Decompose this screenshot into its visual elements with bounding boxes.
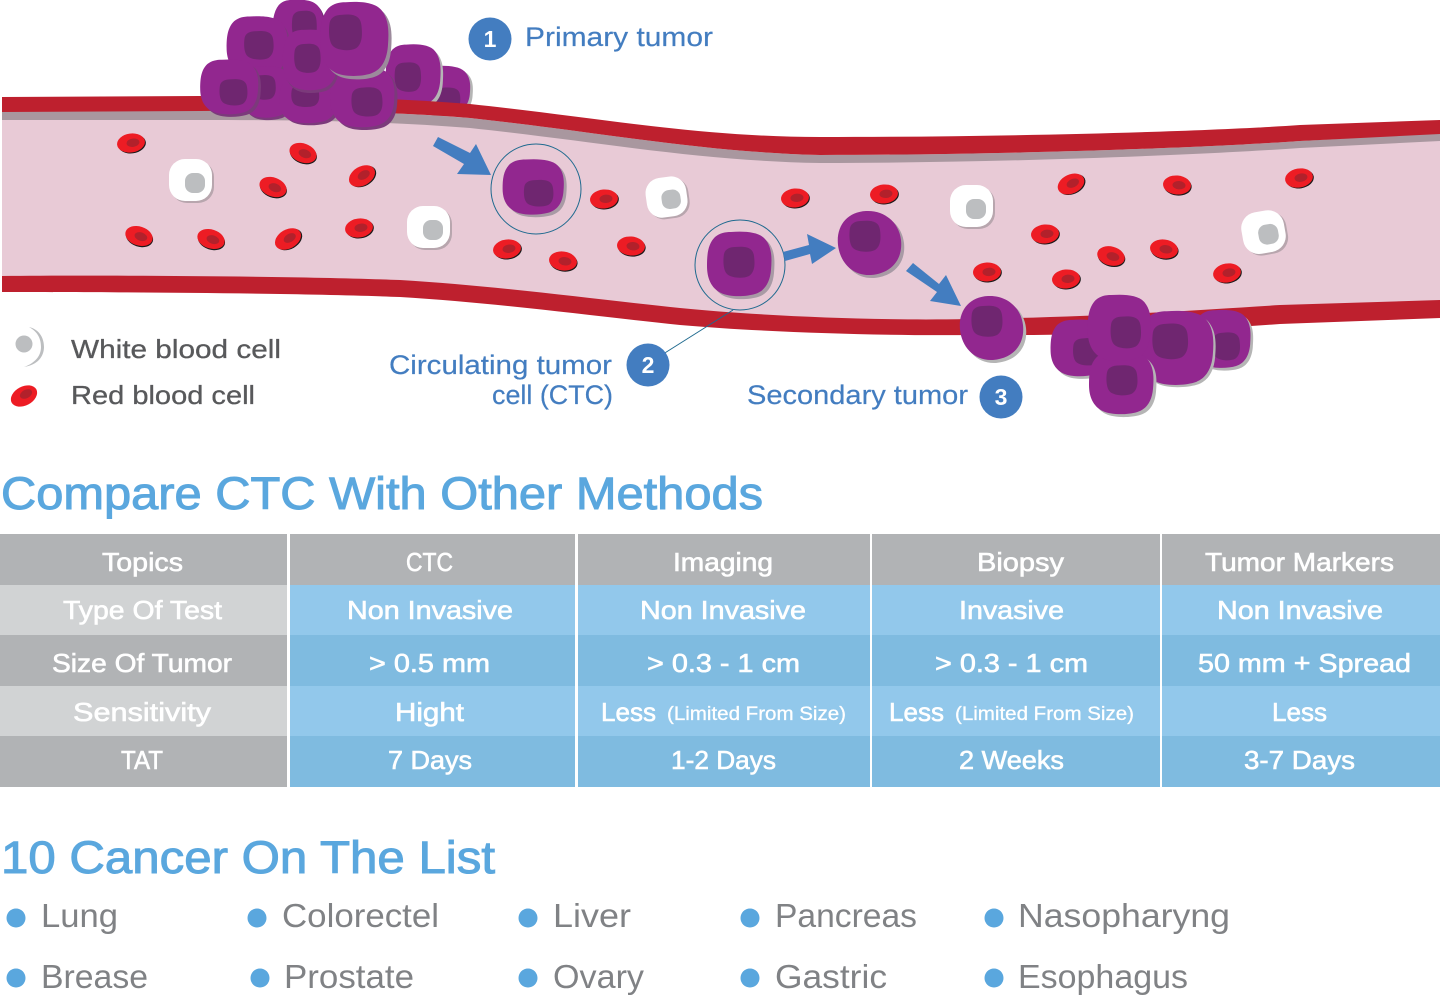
- cancer list: Nasopharyng: [1018, 897, 1230, 934]
- table header row: Topics: [102, 547, 183, 577]
- table row: sensitivity: Hight: [395, 697, 465, 727]
- table row: TAT: 3-7 Days: [1244, 745, 1355, 775]
- table header row: CTC: [406, 547, 453, 577]
- table row: sensitivity: Less: [1272, 697, 1327, 727]
- table row: TAT: [121, 745, 1355, 775]
- cancer list: Lung: [41, 897, 118, 934]
- icon: migrating tumor cell: [838, 211, 904, 278]
- table row: sensitivity: [73, 697, 1327, 727]
- heading: compare methods: Compare CTC With Other Methods: [1, 468, 763, 519]
- leader line to label 2: [660, 310, 733, 356]
- cancer list: Prostate: [284, 958, 414, 995]
- label: secondary tumor: Secondary tumor: [747, 380, 968, 410]
- red blood cells: [116, 132, 1315, 291]
- table row: sensitivity: (Limited From Size): [955, 704, 1134, 725]
- label: circulating tumor cell: [389, 344, 670, 410]
- legend: white blood cell: [16, 327, 281, 367]
- table row: TAT: 1-2 Days: [671, 745, 776, 775]
- table row: type of test: Non Invasive: [640, 595, 806, 625]
- cancer list: [6, 897, 1230, 995]
- table row: TAT: 7 Days: [388, 745, 472, 775]
- icon: extravasating tumor cell: [960, 296, 1026, 363]
- arrow: tumor cell into vessel: [433, 137, 491, 175]
- arrow: to extravasating cell: [906, 263, 961, 306]
- table row: sensitivity: Less: [601, 697, 656, 727]
- legend: white blood cell: White blood cell: [71, 334, 281, 364]
- table row: TAT: 2 Weeks: [959, 745, 1064, 775]
- icon: circulating tumor cell 2: [695, 220, 785, 310]
- table row: type of test: Non Invasive: [347, 595, 513, 625]
- cancer list: Brease: [41, 958, 148, 995]
- icon: primary tumor cell cluster: [200, 0, 397, 130]
- table row: size of tumor: > 0.3 - 1 cm: [935, 648, 1088, 678]
- cancer list: Esophagus: [1018, 958, 1188, 995]
- icon: primary tumor back cells behind vessel wall: [386, 44, 473, 116]
- table row: type of test: Non Invasive: [1217, 595, 1383, 625]
- table row: type of test: Invasive: [959, 595, 1064, 625]
- table row: type of test: [63, 595, 1383, 625]
- cancer list: Pancreas: [775, 897, 917, 934]
- label: secondary tumor: 3: [995, 384, 1007, 410]
- table row: size of tumor: Size Of Tumor: [52, 648, 232, 678]
- table header row: [102, 547, 1394, 577]
- label: primary tumor: [468, 18, 713, 60]
- label: secondary tumor: [747, 376, 1022, 418]
- legend: red blood cell: Red blood cell: [71, 380, 255, 410]
- table row: TAT: TAT: [121, 745, 163, 775]
- comparison table: [0, 534, 1440, 787]
- label: circulating tumor cell: 2: [642, 352, 654, 378]
- table header row: Tumor Markers: [1205, 547, 1394, 577]
- label: primary tumor: Primary tumor: [525, 22, 713, 52]
- table row: sensitivity: (Limited From Size): [667, 704, 846, 725]
- table header row: Biopsy: [977, 547, 1064, 577]
- table row: size of tumor: > 0.3 - 1 cm: [647, 648, 800, 678]
- table row: size of tumor: [52, 648, 1411, 678]
- cancer list: Colorectel: [282, 897, 439, 934]
- label: circulating tumor cell: Circulating tumor: [389, 350, 612, 380]
- white blood cells: [169, 159, 1291, 258]
- table row: size of tumor: 50 mm + Spread: [1198, 648, 1411, 678]
- blood vessel: [2, 96, 1440, 335]
- heading: cancer list: 10 Cancer On The List: [1, 832, 496, 883]
- arrow: to migrating cell: [783, 234, 836, 264]
- legend: red blood cell: [7, 380, 255, 411]
- table row: size of tumor: > 0.5 mm: [369, 648, 490, 678]
- label: circulating tumor cell: cell (CTC): [492, 380, 613, 410]
- table row: type of test: Type Of Test: [63, 595, 223, 625]
- table header row: Imaging: [673, 547, 773, 577]
- cancer list: Gastric: [775, 958, 887, 995]
- cancer list: Ovary: [553, 958, 645, 995]
- label: primary tumor: 1: [484, 26, 497, 52]
- table row: sensitivity: Sensitivity: [73, 697, 211, 727]
- table row: sensitivity: Less: [889, 697, 944, 727]
- icon: circulating tumor cell 1: [491, 144, 581, 234]
- icon: secondary tumor cluster: [1051, 295, 1253, 417]
- cancer list: Liver: [553, 897, 631, 934]
